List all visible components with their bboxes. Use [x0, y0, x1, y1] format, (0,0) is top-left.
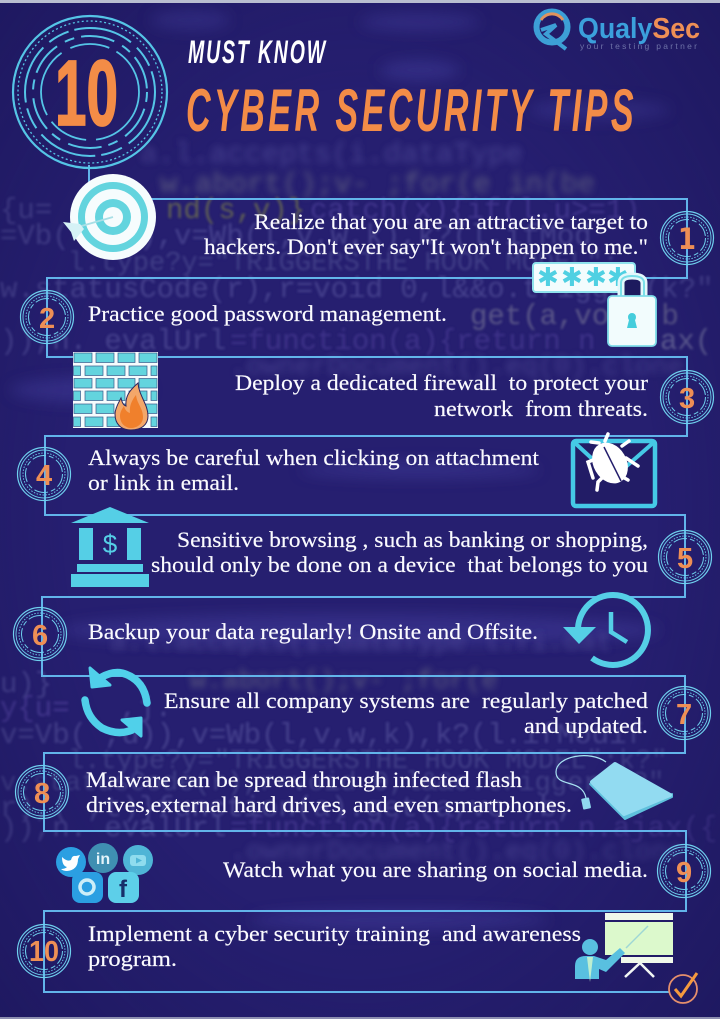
- tip 5 text: [151, 527, 648, 577]
- tip 1 text: Realize that you are an attractive target to: [254, 209, 648, 234]
- icon: check mark: [669, 973, 697, 1003]
- logo wordmark: QualySec: [578, 13, 700, 45]
- background: blurred code texture: r),( ,t)}function(a).get(a,vo ,b,: [0, 792, 574, 825]
- background: blurred code texture: a.l.accepts(i.dataType l.fi.dat: [110, 629, 612, 659]
- background: blurred code texture: w.abort();v- ;for(e: [190, 667, 498, 697]
- background: blurred code texture: {u=: [0, 194, 52, 227]
- tip 2 text: Practice good password management.: [88, 301, 447, 326]
- background: blurred code texture: w.abort();v- ;for(e in(be: [160, 168, 595, 201]
- badge 10: [18, 924, 70, 978]
- tip 10 text: Implement a cyber security training and awareness: [88, 921, 581, 946]
- instagram: [72, 872, 103, 903]
- icon: trainer and board: [575, 913, 673, 982]
- badge 3: 3: [679, 383, 695, 415]
- badge 4: [18, 448, 70, 500]
- tip 5 text: should only be done on a device that belongs to you: [151, 552, 648, 577]
- background: blurred code texture: )),n. evalUrl: [0, 325, 226, 358]
- badge 8: [16, 766, 68, 818]
- background: blurred code texture: )),n. evalUrl: [0, 812, 226, 845]
- badge 6: [14, 608, 66, 660]
- icon: update arrows: [85, 668, 147, 736]
- tip 7 text: Ensure all company systems are regularly patched: [164, 688, 648, 713]
- icon: email with bug: [573, 434, 655, 506]
- background: blurred code texture: .ownerDocument().eq(0).clone: [230, 838, 684, 868]
- badge 3: [660, 370, 714, 424]
- icon: password and padlock: [533, 263, 656, 346]
- badge 1: [660, 212, 714, 264]
- big badge: 10: [13, 16, 167, 168]
- background: blurred code texture: w.statusCode(r),r=void 0,l&&o.trigger(k?": [0, 273, 714, 306]
- tip 4 text: or link in email.: [88, 470, 239, 495]
- background: blurred code texture: l.type?y="TRIGGERSTHE HOOK MODEL":k?": [68, 747, 668, 777]
- tip 4 text: [88, 445, 539, 495]
- icon: external hard drive: [556, 756, 672, 819]
- tip 8 text: [86, 767, 572, 817]
- tip 5 text: Sensitive browsing , such as banking or shopping,: [177, 527, 648, 552]
- background: blurred code texture: ax(: [660, 325, 712, 358]
- background: blurred code texture: get(a,vo 0,b: [470, 300, 679, 333]
- badge 7: [658, 686, 710, 740]
- icon: bank: $: [103, 529, 118, 559]
- background: blurred code texture: .ownerDocument().eq(0).clone: [230, 353, 684, 383]
- tip 3 text: network from threats.: [434, 396, 648, 421]
- tip 3 text: [235, 370, 649, 421]
- heading: must know: MUST KNOW: [188, 34, 327, 70]
- badge 9: 9: [676, 857, 692, 889]
- icon: password and padlock: ✱✱✱✱: [537, 263, 629, 293]
- badge 5: 5: [677, 543, 693, 575]
- background: blurred code texture: l.type?y="TRIGGERSTHE HOOK MODEL":: [68, 249, 619, 279]
- tip 8 text: drives,external hard drives, and even smartphones.: [86, 792, 572, 817]
- background: blurred code texture: ,j.: [120, 692, 172, 725]
- badge 2: 2: [39, 303, 55, 335]
- icon: social media: [56, 843, 153, 903]
- big number: 10: [55, 41, 118, 145]
- background: blurred code texture: nd(s,v)}: [166, 194, 305, 227]
- icon: bank: [71, 507, 149, 587]
- icon: firewall: [73, 352, 158, 430]
- background: blurred code texture: v=Vb( ,d)),v=Wb(l,v,w,k),k?(l.ifModif: [0, 719, 644, 752]
- tip 7 text: and updated.: [524, 713, 648, 738]
- youtube: [123, 845, 153, 875]
- badge 6: 6: [32, 620, 48, 652]
- connector path: [42, 165, 687, 992]
- flame: [115, 383, 148, 430]
- background: blurred code texture: catch(x){if(l.u>=1): [310, 194, 641, 227]
- tip 4 text: Always be careful when clicking on attachment: [88, 445, 539, 470]
- tip 8 text: Malware can be spread through infected flash: [86, 767, 522, 792]
- background: blurred code texture: y{u=: [0, 692, 70, 725]
- tip 10 text: program.: [88, 946, 177, 971]
- logo tagline: your testing partner: [580, 41, 697, 51]
- badge 10: 10: [29, 936, 59, 968]
- badge 8: 8: [34, 778, 50, 810]
- badge 5: [658, 530, 712, 584]
- tip 6 text: Backup your data regularly! Onsite and Offsite.: [88, 619, 538, 644]
- background: blurred code texture: =function(a){return n: [230, 325, 595, 358]
- tip 7 text: [164, 688, 648, 738]
- icon: target: [63, 174, 156, 260]
- twitter: [56, 847, 86, 877]
- tip 3 text: Deploy a dedicated firewall to protect your: [235, 370, 649, 395]
- tip 10 text: [88, 921, 581, 971]
- linkedin: in: [96, 851, 110, 868]
- big badge rings: [13, 16, 167, 168]
- badge 2: [20, 290, 74, 344]
- badge 9: [658, 844, 710, 898]
- background: blurred code texture: a.l.accepts(i.dataType: [140, 138, 523, 171]
- badge 7: 7: [676, 699, 692, 731]
- badge 1: 1: [678, 222, 696, 256]
- background: blurred code texture: =function(a){return n.ajax({: [230, 812, 717, 845]
- logo mark: [536, 12, 568, 49]
- logo: QualySec: [536, 12, 700, 51]
- icon: backup clock: [563, 595, 648, 665]
- tip 1 text: hackers. Don't ever say"It won't happen to me.": [204, 234, 648, 259]
- background: blurred code texture: =Vb( ,d)),v=Wb(l,v,w,k),k?(l.ifMod: [0, 220, 592, 253]
- tip 1 text: [204, 209, 648, 259]
- tip 9 text: Watch what you are sharing on social media.: [223, 857, 648, 882]
- badge 4: 4: [36, 460, 52, 492]
- background: blurred code texture: u)}: [0, 668, 52, 701]
- facebook: f: [119, 876, 128, 903]
- background: blurred code texture: v.statusCode(r),r=void 0,l&&o.trigger(k?": [0, 769, 664, 799]
